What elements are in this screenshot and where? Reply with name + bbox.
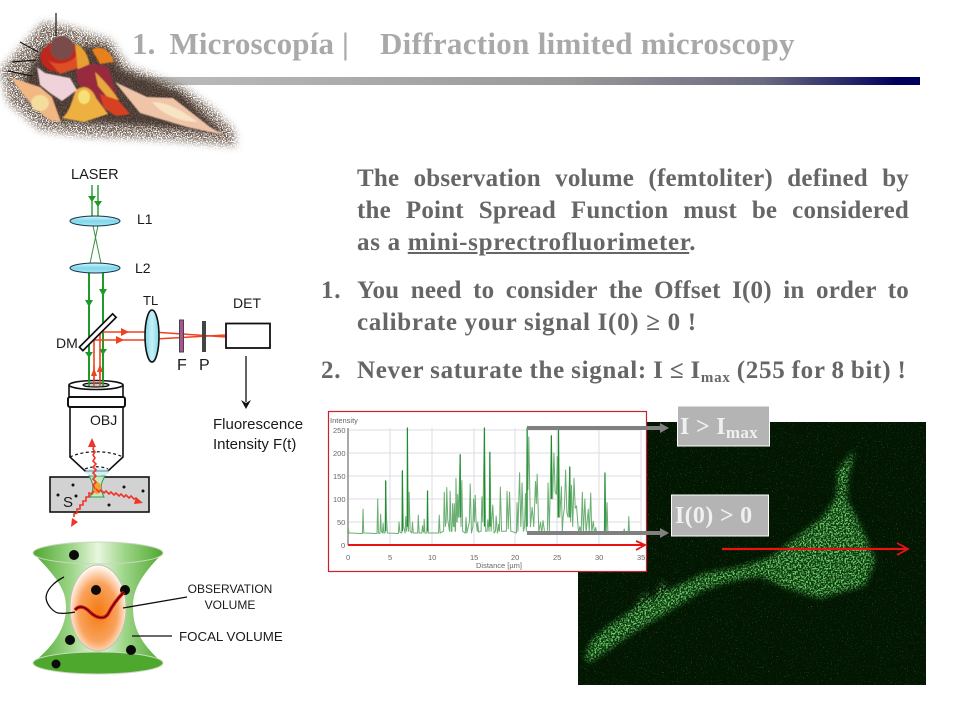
speckled halo	[0, 22, 236, 146]
item 2 text: Never saturate the signal: I ≤ Imax (255 for 8 bit) !	[357, 357, 907, 386]
microscope labels: DET	[233, 295, 261, 311]
number 1: 1.	[321, 277, 341, 304]
grey arrows	[527, 423, 669, 538]
focal hourglass	[33, 553, 163, 663]
list item 2	[321, 357, 907, 386]
text block: observation volume	[357, 165, 909, 256]
axis labels: 15	[470, 553, 478, 562]
molecules	[52, 550, 136, 668]
axis labels: 200	[333, 449, 346, 458]
axis labels: Distance [µm]	[476, 561, 522, 570]
axis labels: 150	[333, 472, 346, 481]
axis labels: 10	[428, 553, 436, 562]
microscope labels: DM	[56, 335, 78, 351]
microscope labels: Fluorescence	[213, 416, 303, 433]
laser rays	[89, 185, 103, 385]
axis labels	[330, 416, 645, 570]
lens L2	[70, 263, 120, 273]
axis labels: 50	[337, 518, 345, 527]
axis labels: 5	[388, 553, 392, 562]
microscope labels: LASER	[71, 167, 119, 183]
microscope labels: S	[63, 494, 73, 511]
microscope labels: FOCAL VOLUME	[179, 629, 283, 644]
axis labels: 100	[333, 495, 346, 504]
axis labels: 25	[553, 553, 561, 562]
illustration: dissected animal	[0, 13, 236, 146]
microscope labels: VOLUME	[205, 598, 255, 612]
microscope labels: OBJ	[90, 412, 117, 428]
microscope labels: L2	[135, 260, 151, 276]
detector	[226, 324, 270, 348]
axis labels: 0	[341, 541, 345, 550]
tube lens	[145, 310, 159, 362]
observation volume diagram	[33, 542, 187, 674]
organs	[12, 36, 224, 135]
callout: saturation	[678, 406, 770, 446]
sample	[50, 477, 149, 512]
axis labels: 0	[346, 553, 350, 562]
line 3: as a mini-sprectrofluorimeter.	[357, 229, 696, 256]
grid	[348, 428, 641, 545]
line 1: The observation volume (femtoliter) defined by	[357, 165, 909, 192]
objective	[68, 380, 125, 471]
callout: saturation: I > I	[680, 414, 726, 440]
axis red arrow	[348, 541, 645, 550]
item 1 line 1: You need to consider the Offset I(0) in order to	[357, 277, 909, 304]
axis labels: 35	[637, 553, 645, 562]
pinhole P	[202, 321, 206, 352]
microscope labels: Intensity F(t)	[213, 436, 296, 453]
callout: saturation: max	[726, 423, 758, 442]
axis labels: 250	[333, 426, 346, 435]
emission rays	[94, 332, 226, 385]
scattered fluorescence rays	[74, 446, 136, 517]
filter F	[180, 320, 184, 352]
microscope labels	[56, 167, 303, 644]
callout: offset	[672, 495, 768, 536]
callout: offset: I(0) > 0	[675, 503, 752, 529]
title: 1. Microscopía | Diffraction limited microscopy	[132, 26, 795, 61]
microscope labels: TL	[143, 293, 158, 308]
microscope labels: OBSERVATION	[188, 582, 272, 596]
focal spot	[85, 468, 109, 497]
lens L1	[70, 216, 120, 226]
dichroic mirror	[79, 314, 116, 351]
gradient title rule	[140, 77, 920, 85]
list item 1	[321, 277, 909, 336]
microscope labels: L1	[137, 211, 153, 227]
microscope diagram	[50, 185, 270, 527]
microscope labels: F	[177, 357, 187, 374]
observation ellipse	[70, 565, 126, 651]
intensity trace	[348, 428, 641, 534]
confocal image: green neuron	[578, 422, 926, 685]
intensity chart	[328, 412, 646, 572]
microscope labels: P	[199, 357, 210, 374]
axis labels: Intensity	[330, 416, 358, 425]
leader lines	[123, 597, 187, 636]
scan line arrow	[722, 543, 908, 555]
item 1 line 2: calibrate your signal I(0) ≥ 0 !	[357, 309, 697, 336]
axis labels: 20	[511, 553, 519, 562]
number 2: 2.	[321, 357, 341, 384]
line 2: the Point Spread Function must be considered	[357, 197, 909, 224]
diffusion trajectory	[46, 577, 124, 618]
axis labels: 30	[595, 553, 603, 562]
detector arrow	[241, 356, 251, 409]
